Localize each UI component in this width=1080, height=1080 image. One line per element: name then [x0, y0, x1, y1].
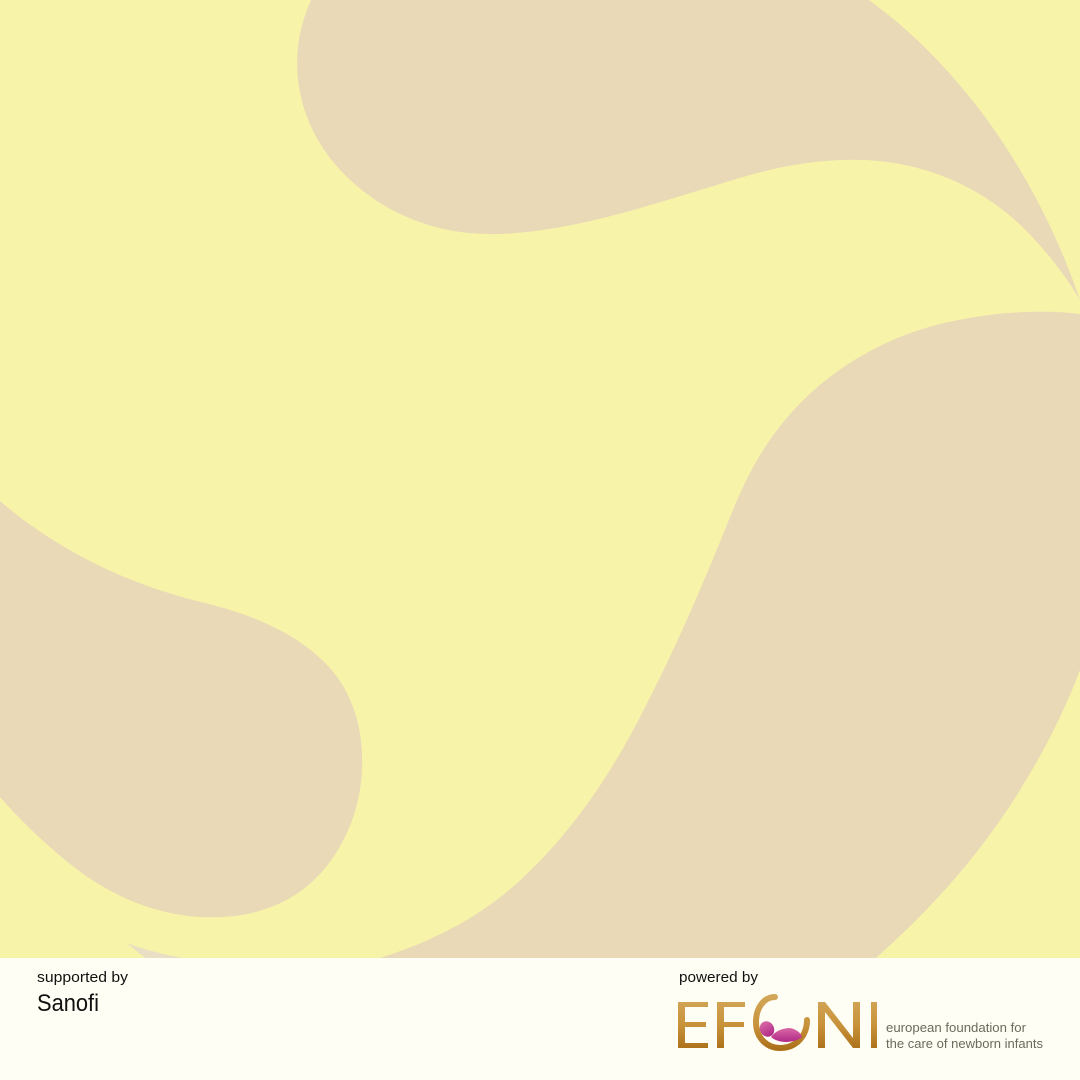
text: Sanofi: Sanofi — [37, 990, 99, 1017]
footer band — [0, 958, 1080, 1080]
logo letter: N — [818, 1002, 860, 1048]
logo letter: C arc — [756, 997, 807, 1048]
logo letter: F — [717, 1002, 745, 1048]
text: supported by: supported by — [37, 969, 129, 986]
icon: baby — [757, 1019, 802, 1042]
text: european foundation for: european foundation for — [886, 1020, 1027, 1035]
shape: top swoosh — [297, 0, 1080, 300]
text: the care of newborn infants: the care of newborn infants — [886, 1036, 1043, 1051]
logo letter: E — [678, 1002, 708, 1048]
shape: lower sliver — [127, 943, 182, 958]
shape: left swoosh — [0, 501, 362, 917]
text: powered by: powered by — [679, 969, 758, 986]
logo: powered by EFCNI — [678, 969, 1043, 1051]
baby head — [757, 1019, 777, 1039]
sponsor: supported by Sanofi — [37, 969, 129, 1017]
shape: right swoosh — [380, 312, 1080, 958]
baby body — [771, 1028, 802, 1042]
logo letter: I — [871, 1002, 877, 1048]
